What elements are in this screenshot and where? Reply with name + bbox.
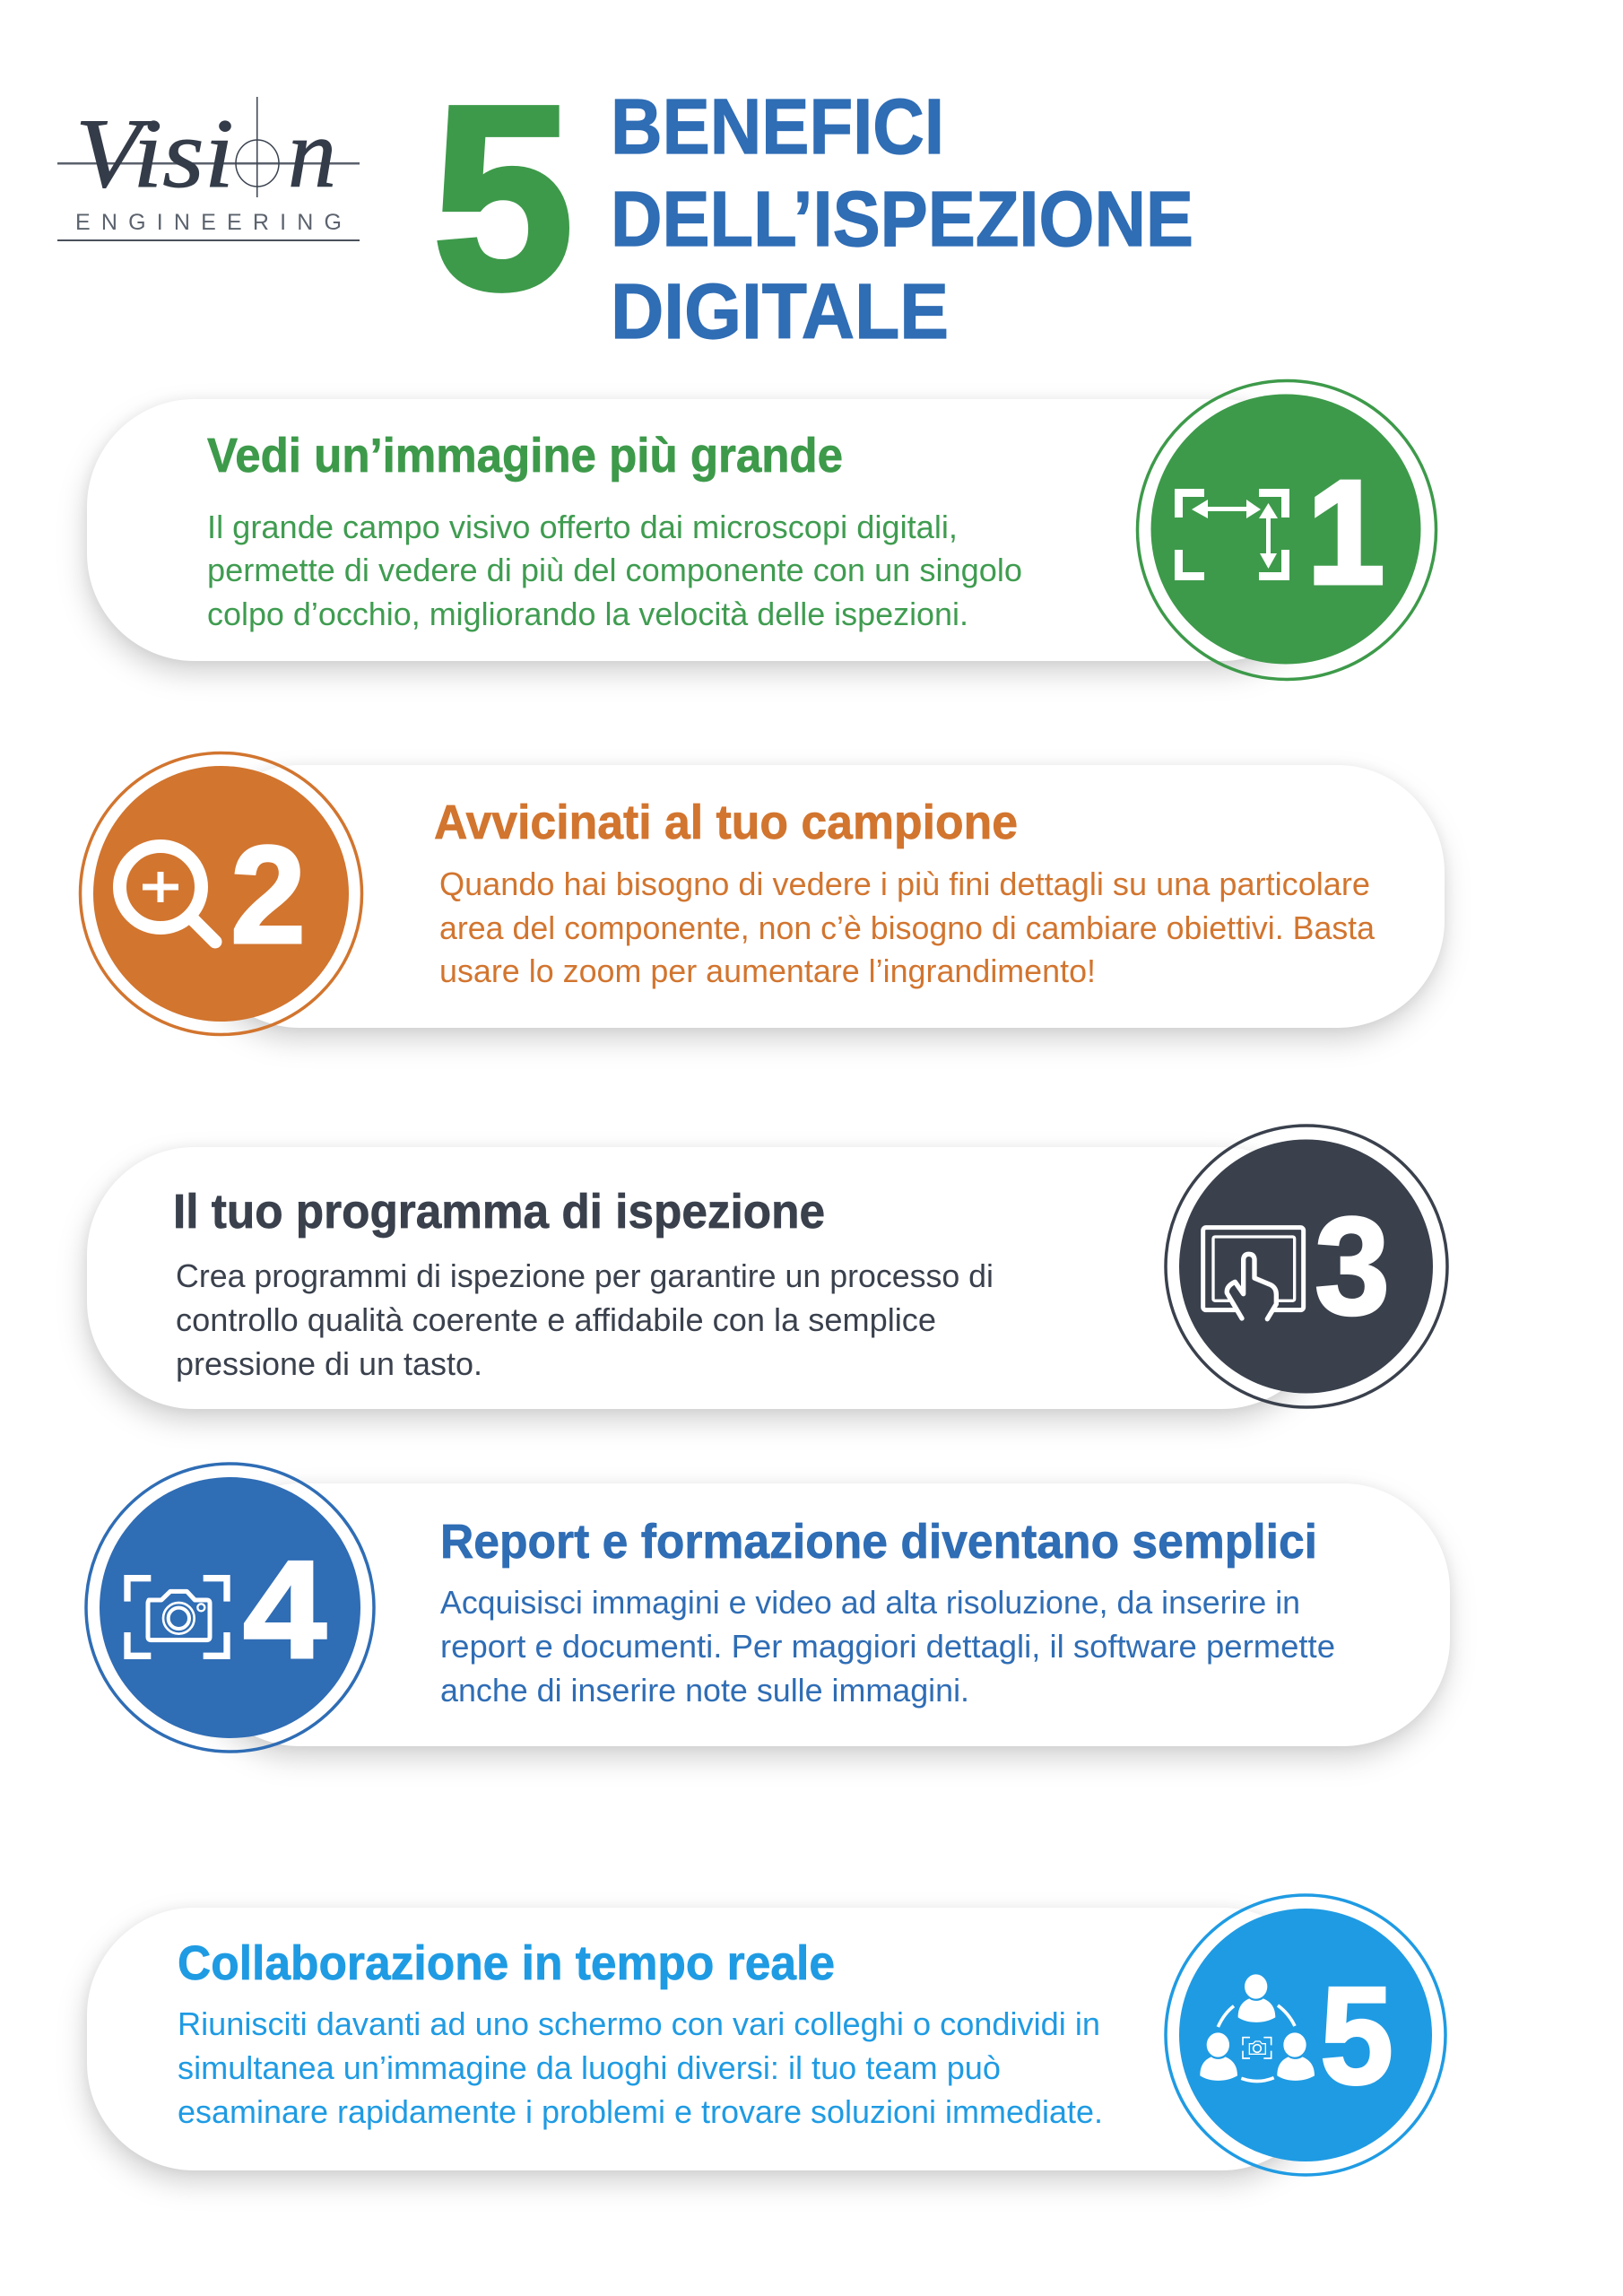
icon: zoom magnifier: [120, 847, 215, 942]
text: benefit 5: [178, 2005, 1103, 2130]
badge: number 3: 3: [1315, 1188, 1390, 1344]
title: DIGITALE: [611, 268, 949, 355]
badge: number 1: [1137, 380, 1436, 680]
text: benefit 3: controllo qualità coerente e affidabile con la semplice: [176, 1301, 936, 1338]
badge: number 2: [81, 753, 362, 1035]
panel: benefit 5: [87, 1895, 1445, 2175]
badge: number 5: [1166, 1895, 1445, 2175]
panel: benefit 1: [87, 380, 1436, 680]
text: benefit 1: colpo d’occhio, migliorando la velocità delle ispezioni.: [207, 596, 968, 632]
text: benefit 1: Il grande campo visivo offerto dai microscopi digitali,: [207, 509, 958, 545]
heading: benefit 3: Il tuo programma di ispezione: [173, 1185, 825, 1239]
text: benefit 5: esaminare rapidamente i problemi e trovare soluzioni immediate.: [178, 2093, 1103, 2130]
text: benefit 3: Crea programmi di ispezione per garantire un processo di: [176, 1257, 994, 1294]
badge: number 5: 5: [1320, 1958, 1393, 2113]
text: benefit 5: simultanea un’immagine da luoghi diversi: il tuo team può: [178, 2049, 1001, 2086]
badge: number 3: [1166, 1126, 1447, 1407]
text: benefit 4: report e documenti. Per maggiori dettagli, il software permette: [440, 1628, 1335, 1665]
title: [611, 83, 1193, 355]
badge: number 4: 4: [243, 1532, 326, 1687]
text: benefit 2: area del componente, non c’è bisogno di cambiare obiettivi. Basta: [439, 909, 1376, 946]
text: benefit 1: permette di vedere di più del componente con un singolo: [207, 552, 1022, 588]
text: benefit 2: Quando hai bisogno di vedere i più fini dettagli su una particolare: [439, 865, 1370, 902]
title: DELL’ISPEZIONE: [611, 176, 1193, 263]
logo: Vision Engineering: Visi: [75, 99, 234, 208]
icon: team around shared image: [1200, 1974, 1315, 2082]
text: benefit 2: usare lo zoom per aumentare l’ingrandimento!: [439, 952, 1096, 989]
text: benefit 5: Riunisciti davanti ad uno schermo con vari colleghi o condividi in: [178, 2005, 1100, 2042]
heading: benefit 5: Collaborazione in tempo reale: [178, 1936, 835, 1990]
badge: number 2: 2: [230, 817, 306, 972]
text: benefit 4: anche di inserire note sulle immagini.: [440, 1672, 969, 1709]
icon: touch screen: [1203, 1228, 1304, 1319]
icon: expand field of view: [1178, 493, 1286, 576]
panel: benefit 4: [86, 1464, 1450, 1752]
heading: benefit 4: Report e formazione diventano semplici: [440, 1515, 1317, 1569]
text: benefit 1: [207, 509, 1022, 632]
text: benefit 3: pressione di un tasto.: [176, 1345, 482, 1382]
text: benefit 4: [440, 1584, 1335, 1709]
badge: number 1: 1: [1307, 450, 1384, 614]
logo: Vision Engineering: n: [288, 99, 336, 208]
badge: number 4: [86, 1464, 374, 1752]
text: benefit 3: [176, 1257, 994, 1382]
icon: camera: [127, 1578, 227, 1656]
panel: benefit 2: [81, 753, 1445, 1035]
title: BENEFICI: [611, 83, 944, 170]
logo: Vision Engineering: [57, 97, 360, 241]
text: benefit 2: [439, 865, 1376, 989]
heading: benefit 2: Avvicinati al tuo campione: [434, 796, 1018, 849]
text: benefit 4: Acquisisci immagini e video ad alta risoluzione, da inserire in: [440, 1584, 1300, 1621]
heading: benefit 1: Vedi un’immagine più grande: [207, 429, 843, 483]
logo: Vision Engineering: ENGINEERING: [75, 210, 342, 235]
big number 5: 5: [432, 51, 574, 344]
panel: benefit 3: [87, 1126, 1447, 1409]
